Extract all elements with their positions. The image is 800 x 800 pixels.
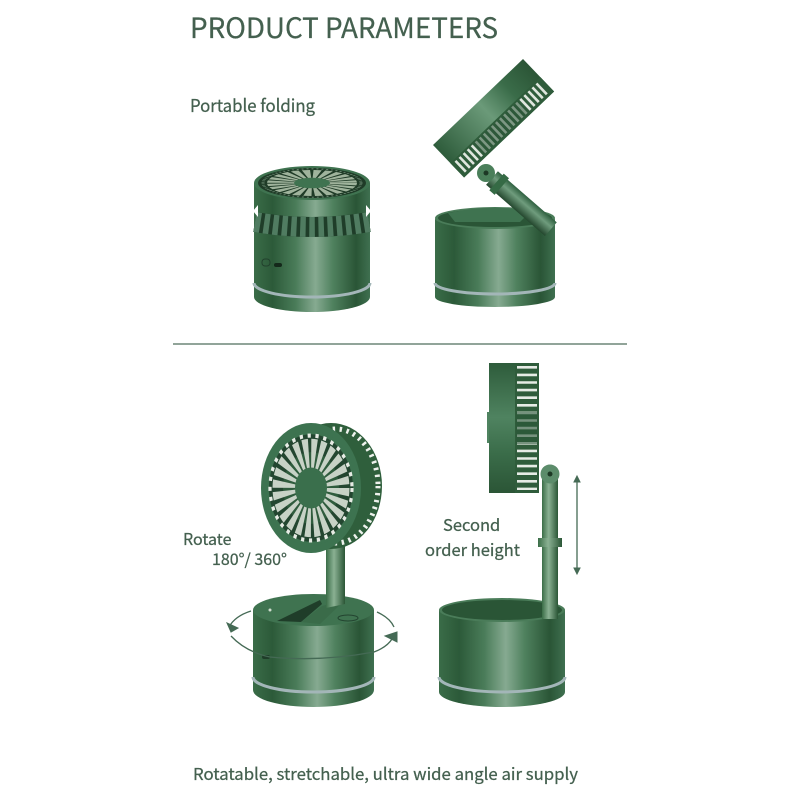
folded fan product [253,166,371,312]
label: portable folding: Portable folding [190,93,315,118]
half-open fan product [433,59,557,307]
folded fan top grille [254,166,370,200]
extended fan stem [538,464,562,610]
rotating fan base [253,588,374,707]
caption: Rotatable, stretchable, ultra wide angle air supply [193,761,578,785]
rotating fan product [227,423,397,707]
folded fan switch and port [262,259,282,267]
extended fan product [439,363,580,707]
title: PRODUCT PARAMETERS [190,7,498,47]
half-open tilted fan head [433,59,554,178]
extended fan head [487,363,539,493]
rotating fan rear housing [280,423,382,549]
extended fan base [439,592,565,707]
height label: Second [443,512,500,536]
divider [173,343,627,345]
folded fan body [254,183,370,312]
rotating fan stem [326,545,345,605]
rotating fan front grille [261,423,361,553]
half-open fan stem [477,164,557,236]
height label: order height [425,537,520,561]
rotate label: Rotate [183,526,232,550]
rotate label: 180°/ 360° [212,546,287,570]
half-open fan base [435,207,555,307]
rotation arrows [227,611,397,659]
height arrow [574,476,580,574]
folded fan side vents [253,205,371,227]
folded fan light ring [254,283,370,297]
rotate label [183,526,287,570]
height label [425,512,520,561]
